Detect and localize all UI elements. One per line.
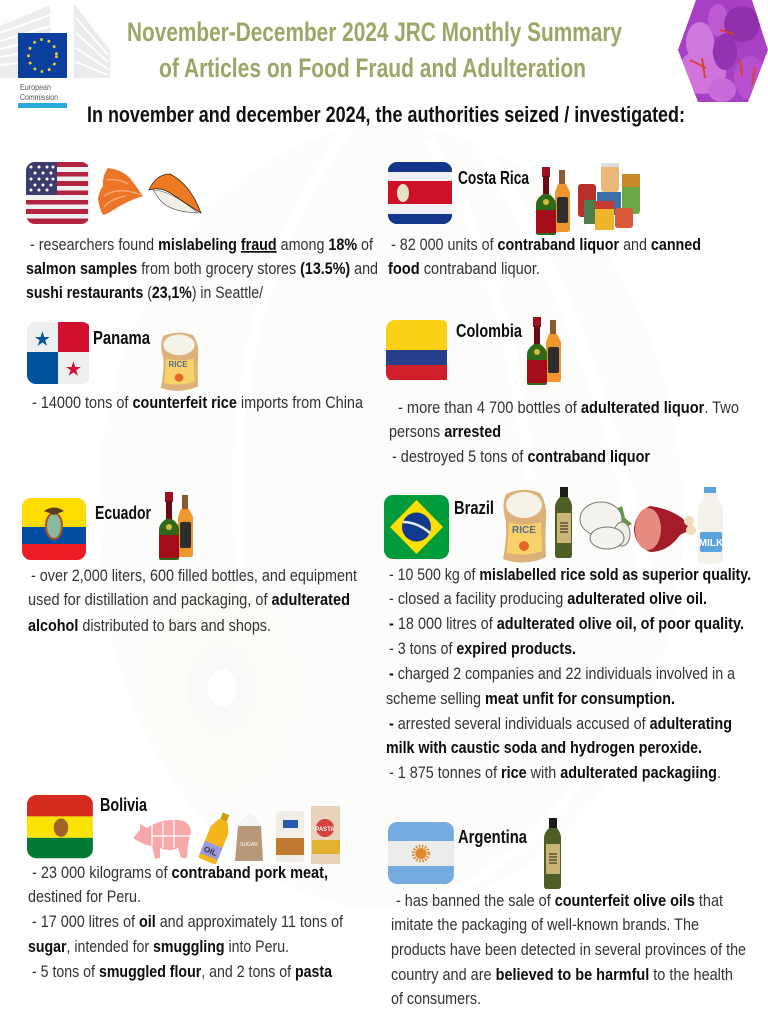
flag: Brazil xyxy=(384,495,449,559)
text block: Ecuador: - over 2,000 liters, 600 filled bottles, and equipment xyxy=(31,566,357,585)
icon: salmon fillet xyxy=(98,168,143,215)
text block: Brazil: - 1 875 tonnes of rice with adulterated packagiing. xyxy=(389,763,721,782)
flag: Colombia xyxy=(386,320,447,380)
text block: Bolivia: - 5 tons of smuggled flour, and 2 tons of pasta xyxy=(32,962,332,981)
heading: Bolivia: Bolivia xyxy=(100,795,148,815)
icon: oil bottle xyxy=(198,810,235,865)
icon: rice sack: RICE xyxy=(168,360,188,369)
text block: Ecuador: used for distillation and packaging, of adulterated xyxy=(28,590,350,609)
icon: rice sack xyxy=(161,333,198,391)
flag: Ecuador xyxy=(22,498,86,560)
title: November-December 2024 JRC Monthly Summary xyxy=(127,17,622,47)
icon: flour bag xyxy=(276,811,304,862)
flag: Costa Rica xyxy=(388,162,452,224)
heading: Ecuador: Ecuador xyxy=(95,503,151,523)
text block: Argentina: imitate the packaging of well-known brands. The xyxy=(391,915,699,934)
text block: Brazil: - 3 tons of expired products. xyxy=(389,639,576,658)
heading: Colombia: Colombia xyxy=(456,321,523,341)
text block: Bolivia xyxy=(28,863,343,981)
text block: Colombia xyxy=(389,398,739,466)
icon: pig xyxy=(133,820,191,859)
background watermark xyxy=(97,126,683,910)
text block: USA xyxy=(26,235,378,302)
heading: Brazil: Brazil xyxy=(454,498,494,518)
title: of Articles on Food Fraud and Adulteration xyxy=(159,53,586,83)
heading: Argentina: Argentina xyxy=(458,827,528,847)
text block: Colombia: - destroyed 5 tons of contraband liquor xyxy=(392,447,650,466)
saffron hexagon image xyxy=(675,0,768,104)
icon: rice sack xyxy=(503,490,546,563)
icon: canned food xyxy=(578,163,640,230)
icon: olive oil bottle xyxy=(544,818,561,889)
text block: Argentina: country and are believed to be harmful to the health xyxy=(391,965,733,984)
text block: Bolivia: destined for Peru. xyxy=(28,887,141,906)
text block: Bolivia: - 17 000 litres of oil and approximately 11 tons of xyxy=(32,912,343,931)
icon: milk bottle: MILK xyxy=(699,538,724,549)
panel: Costa Rica xyxy=(388,162,701,278)
panel: Argentina xyxy=(388,818,746,1008)
text block: USA: sushi restaurants (23,1%) in Seattle/ xyxy=(26,283,263,302)
icon: pasta bag xyxy=(311,806,340,864)
icon: milk bottle xyxy=(698,487,724,564)
text block: USA: salmon samples from both grocery stores (13.5%) and xyxy=(26,259,378,278)
panel: USA xyxy=(26,162,378,302)
text block: Bolivia: - 23 000 kilograms of contraband pork meat, xyxy=(32,863,328,882)
text block: Costa Rica xyxy=(388,235,701,278)
logo: European Commission xyxy=(0,4,110,108)
flag: USA xyxy=(26,162,90,224)
icon: oil bottle: OIL xyxy=(203,845,218,858)
icon: liquor bottles xyxy=(536,167,570,235)
text block: Brazil: milk with caustic soda and hydrogen peroxide. xyxy=(386,738,702,757)
text block: Ecuador xyxy=(28,566,357,635)
icon: ham xyxy=(634,506,696,552)
text block: Brazil xyxy=(386,565,751,782)
icon: liquor bottles xyxy=(527,317,561,385)
panel: Bolivia xyxy=(27,795,343,981)
icon: liquor bottles xyxy=(159,492,193,560)
text block: Argentina: of consumers. xyxy=(391,989,481,1008)
text block: Brazil: scheme selling meat unfit for consumption. xyxy=(386,689,675,708)
logo: European Commission: Commission xyxy=(20,92,58,102)
text block: Bolivia: sugar, intended for smuggling into Peru. xyxy=(28,937,289,956)
text block: Ecuador: alcohol distributed to bars and shops. xyxy=(28,616,271,635)
title xyxy=(127,17,622,83)
icon: pasta bag: PASTA xyxy=(315,827,335,833)
text block: Argentina: - has banned the sale of counterfeit olive oils that xyxy=(396,891,723,910)
text block: Costa Rica: - 82 000 units of contraband liquor and canned xyxy=(391,235,701,254)
icon: sugar sack xyxy=(235,813,263,861)
text block: USA: - researchers found mislabeling fraud among 18% of xyxy=(30,235,373,254)
text block: Argentina xyxy=(391,891,746,1008)
panel: Colombia xyxy=(386,317,739,466)
flag: Bolivia xyxy=(27,795,93,859)
icon: sugar sack: SUGAR xyxy=(240,842,258,848)
icon: olive oil bottle xyxy=(555,487,572,558)
text block: Colombia: - more than 4 700 bottles of adulterated liquor. Two xyxy=(398,398,739,417)
text block: Costa Rica: food contraband liquor. xyxy=(388,259,540,278)
icon: mozzarella xyxy=(580,502,632,549)
icon: rice sack: RICE xyxy=(512,525,536,536)
icon: salmon sushi xyxy=(149,174,201,213)
panel: Panama xyxy=(27,322,363,412)
text block: Brazil: - closed a facility producing adulterated olive oil. xyxy=(389,589,707,608)
heading: Costa Rica: Costa Rica xyxy=(458,168,530,188)
heading: Panama: Panama xyxy=(93,328,151,348)
logo: European Commission: European xyxy=(20,82,51,92)
flag: Argentina xyxy=(388,822,454,884)
text block: Panama: - 14000 tons of counterfeit rice imports from China xyxy=(32,393,363,412)
text block: Brazil: - arrested several individuals accused of adulterating xyxy=(389,714,732,733)
text block: Colombia: persons arrested xyxy=(389,422,501,441)
panel: Ecuador xyxy=(22,492,357,635)
panel: Brazil xyxy=(384,487,751,782)
flag: Panama xyxy=(27,322,89,384)
